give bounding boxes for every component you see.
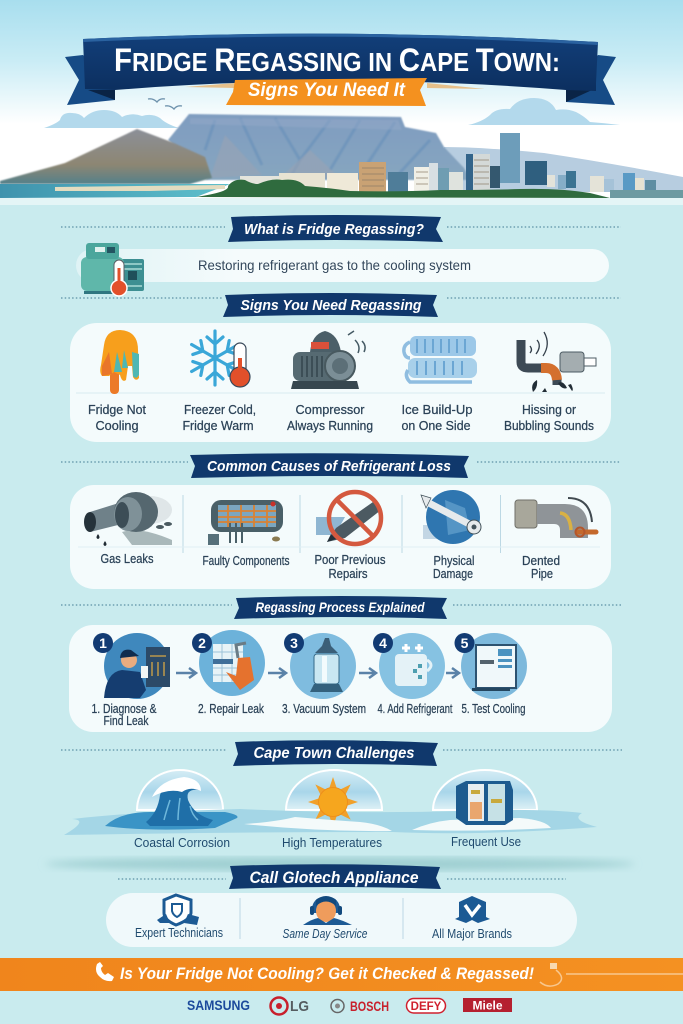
icon: faulty components xyxy=(208,500,283,545)
text: pipe: Pipe xyxy=(531,566,553,581)
icon: gas leak pipe xyxy=(84,492,172,546)
section heading: cape town challenges: Cape Town Challenges xyxy=(254,745,415,762)
section heading: what is fridge regassing xyxy=(61,215,621,242)
buildings xyxy=(240,133,656,193)
text: freezer cold: Freezer Cold, xyxy=(184,402,256,417)
text: poor previous: Poor Previous xyxy=(314,552,386,567)
text: same day service: Same Day Service xyxy=(282,927,368,941)
text: damage: Damage xyxy=(433,566,473,581)
section heading: call glotech xyxy=(118,864,566,889)
text: vacuum system: 3. Vacuum System xyxy=(282,702,366,716)
icon: poor repairs prohibited xyxy=(316,492,381,544)
ribbon tails xyxy=(65,55,115,105)
icon: melting popsicle xyxy=(100,330,139,394)
text: add refrigerant: 4. Add Refrigerant xyxy=(378,702,453,716)
brand logos xyxy=(187,997,512,1015)
panel: call glotech xyxy=(106,893,577,947)
call to action bar xyxy=(0,958,683,991)
logo: miele: Miele xyxy=(472,998,503,1012)
logo: samsung: SAMSUNG xyxy=(187,997,250,1013)
logo: lg xyxy=(270,998,309,1015)
text: cooling: Cooling xyxy=(96,418,138,433)
text: definition: Restoring refrigerant gas to the cooling system xyxy=(198,257,471,273)
title text: FRIDGE REGASSING IN CAPE TOWN: xyxy=(114,42,560,78)
logo: miele xyxy=(463,998,512,1012)
text: bubbling sounds: Bubbling Sounds xyxy=(504,418,594,433)
shadow band xyxy=(45,857,635,871)
panel: causes xyxy=(70,485,611,589)
step 5: test cooling: 5 xyxy=(461,635,469,651)
sand drift centre xyxy=(244,817,392,831)
arrow 4 to 5 xyxy=(446,668,459,678)
text: coastal corrosion: Coastal Corrosion xyxy=(134,835,230,850)
text: faulty components: Faulty Components xyxy=(202,554,290,568)
text: repair leak: 2. Repair Leak xyxy=(198,702,265,716)
section heading: regassing process: Regassing Process Explained xyxy=(256,599,425,615)
icon: expert shield xyxy=(157,895,199,925)
step 3: vacuum xyxy=(284,633,356,699)
section heading: common causes: Common Causes of Refrigerant Loss xyxy=(207,458,451,475)
icon: iced coils xyxy=(404,336,477,382)
text: ice build-up: Ice Build-Up xyxy=(402,402,472,417)
text: hissing or: Hissing or xyxy=(522,402,577,417)
step 2: repair xyxy=(192,630,265,696)
icon: headset agent xyxy=(303,896,352,925)
distant hills xyxy=(444,147,683,192)
icon: ocean wave xyxy=(105,777,238,830)
cloud right xyxy=(468,98,620,125)
step 2: repair: 2 xyxy=(198,635,206,651)
text: find leak: Find Leak xyxy=(104,714,149,728)
logo: defy xyxy=(406,998,446,1013)
section heading: signs you need regassing: Signs You Need Regassing xyxy=(240,297,422,314)
icon: snowflake and thermometer xyxy=(188,331,250,387)
subtitle flash xyxy=(226,78,427,106)
text: on one side: on One Side xyxy=(402,418,470,433)
text: high temperatures: High Temperatures xyxy=(282,835,382,850)
table mountain xyxy=(168,114,470,180)
ribbon main xyxy=(83,34,598,91)
text: repairs: Repairs xyxy=(328,566,368,581)
text: gas leaks: Gas Leaks xyxy=(100,551,154,566)
icon: hook and line xyxy=(540,963,683,986)
text: dented: Dented xyxy=(522,553,560,568)
step 4: add refrigerant xyxy=(373,633,445,699)
arrow 1 to 2 xyxy=(176,668,196,678)
panel: signs xyxy=(70,323,611,442)
arrow 2 to 3 xyxy=(268,668,286,678)
step 5: test cooling xyxy=(454,633,527,699)
lions head xyxy=(0,129,212,184)
step 1: diagnose xyxy=(93,633,170,699)
logo: defy: DEFY xyxy=(411,1001,442,1013)
panel: definition pill xyxy=(76,243,609,296)
icon: dented pipe xyxy=(515,498,596,538)
icon: brands shield xyxy=(455,896,490,923)
icon: compressor xyxy=(291,331,365,389)
icon: sun xyxy=(308,777,358,827)
text: fridge not: Fridge Not xyxy=(88,402,146,417)
dome backgrounds xyxy=(137,770,537,810)
logo: bosch xyxy=(331,998,389,1014)
birds xyxy=(148,99,182,109)
cloud left xyxy=(44,110,179,128)
sand drift right xyxy=(412,818,551,831)
section heading: cape town challenges xyxy=(61,740,622,766)
text: test cooling: 5. Test Cooling xyxy=(462,702,526,716)
icon: hissing pipe xyxy=(521,332,596,392)
arrow 3 to 4 xyxy=(359,668,376,678)
text: call to action: Is Your Fridge Not Cooling? Get it Checked & Regassed! xyxy=(120,964,534,983)
header scene: Cape Town skyline xyxy=(0,0,683,205)
icon: physical damage wrench xyxy=(421,490,481,544)
step 1: diagnose: 1 xyxy=(99,635,107,651)
panel: process xyxy=(69,625,612,732)
icon: refrigerant cylinder with thermometer xyxy=(81,243,144,296)
logo: lg: LG xyxy=(290,998,309,1015)
subtitle text: Signs You Need It xyxy=(248,80,406,101)
text: expert technicians: Expert Technicians xyxy=(135,926,223,940)
step 3: vacuum: 3 xyxy=(290,635,298,651)
section heading: call glotech: Call Glotech Appliance xyxy=(250,868,418,887)
icon: open fridge xyxy=(456,781,513,825)
section heading: common causes xyxy=(61,453,621,478)
step 4: add refrigerant: 4 xyxy=(379,635,387,651)
section heading: regassing process xyxy=(61,596,622,619)
text: all major brands: All Major Brands xyxy=(432,927,512,941)
sea xyxy=(0,184,230,198)
section heading: signs you need regassing xyxy=(61,293,621,317)
section heading: what is fridge regassing: What is Fridge Regassing? xyxy=(244,221,424,238)
title banner xyxy=(65,34,616,106)
text: fridge warm: Fridge Warm xyxy=(182,418,254,433)
flare behind subtitle xyxy=(185,83,485,89)
panel: cape town challenges xyxy=(64,770,597,850)
icon: phone xyxy=(96,962,114,981)
logo: bosch: BOSCH xyxy=(350,998,389,1014)
trees and shoreline xyxy=(196,180,610,198)
text: diagnose and: 1. Diagnose & xyxy=(92,702,157,716)
text: physical: Physical xyxy=(434,553,475,568)
text: compressor: Compressor xyxy=(296,402,365,417)
text: frequent use: Frequent Use xyxy=(451,834,521,849)
text: always running: Always Running xyxy=(287,418,373,433)
water strip xyxy=(64,809,597,835)
